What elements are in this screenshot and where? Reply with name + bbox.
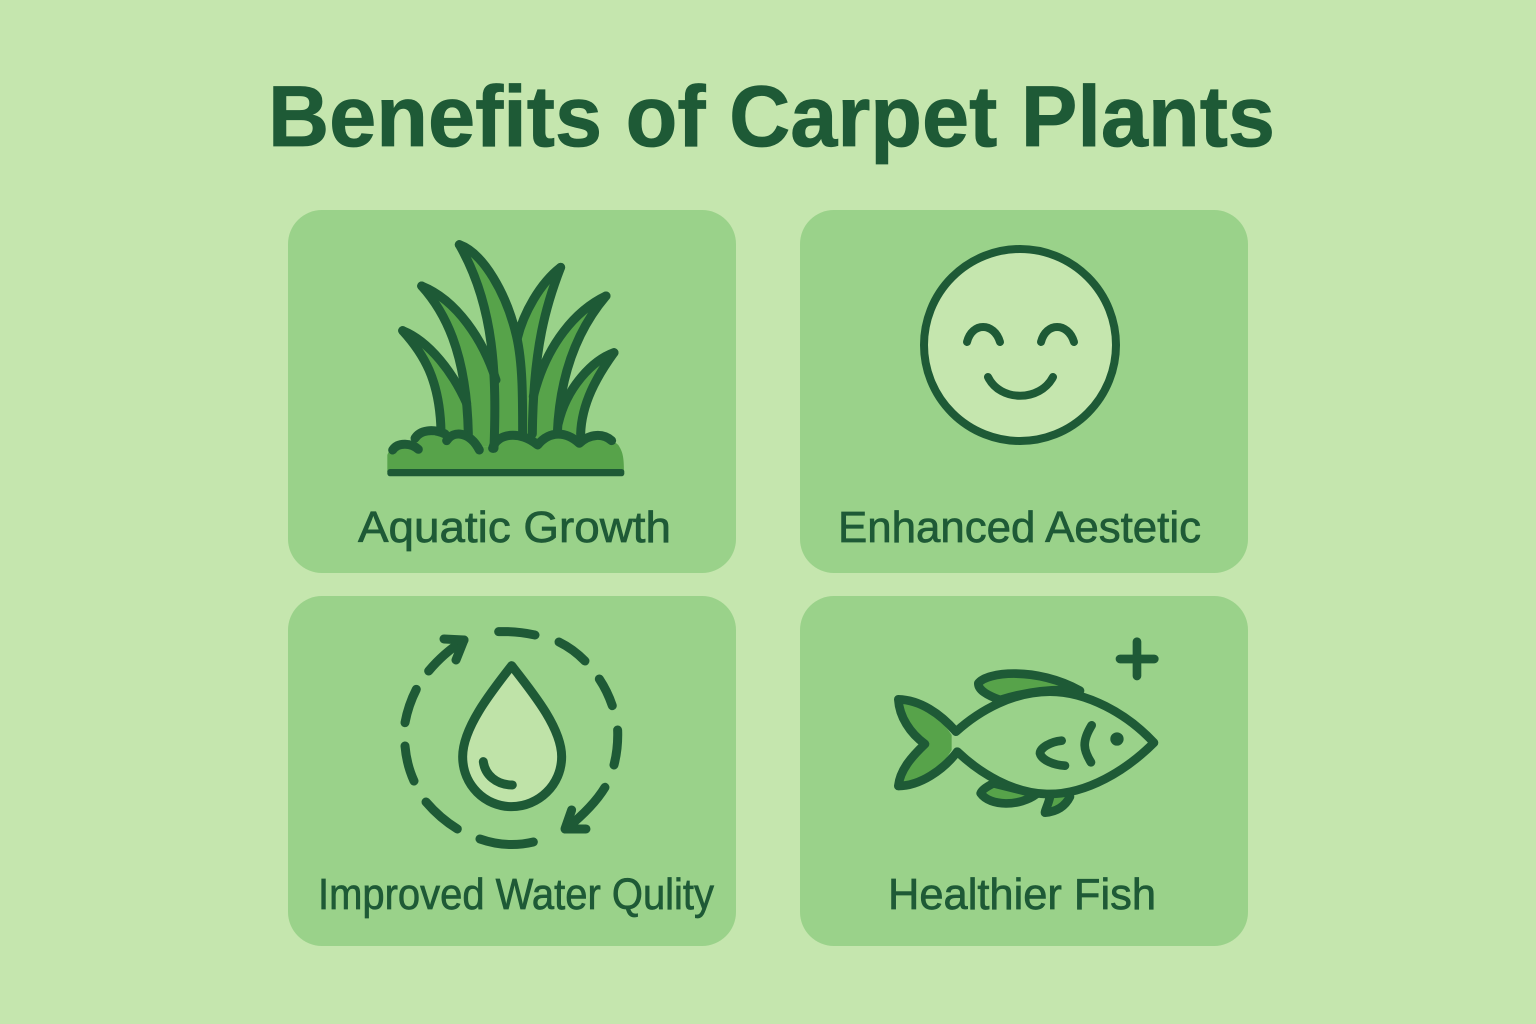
panel: improved water quality — [288, 596, 736, 946]
icon: fish with plus — [898, 642, 1154, 813]
label: aquatic growth: Aquatic Growth — [358, 503, 671, 552]
panel: aquatic growth — [288, 210, 736, 573]
icon: water drop with cycle — [405, 632, 618, 845]
panel: enhanced aesthetic — [800, 210, 1248, 573]
icon: grass — [387, 245, 624, 476]
panel: healthier fish — [800, 596, 1248, 946]
title: Benefits of Carpet Plants — [268, 69, 1275, 165]
label: healthier fish: Healthier Fish — [888, 870, 1156, 919]
label: improved water quality: Improved Water Qulity — [318, 870, 714, 919]
icon: smiley face — [924, 249, 1116, 441]
label: enhanced aestetic: Enhanced Aestetic — [838, 503, 1201, 552]
